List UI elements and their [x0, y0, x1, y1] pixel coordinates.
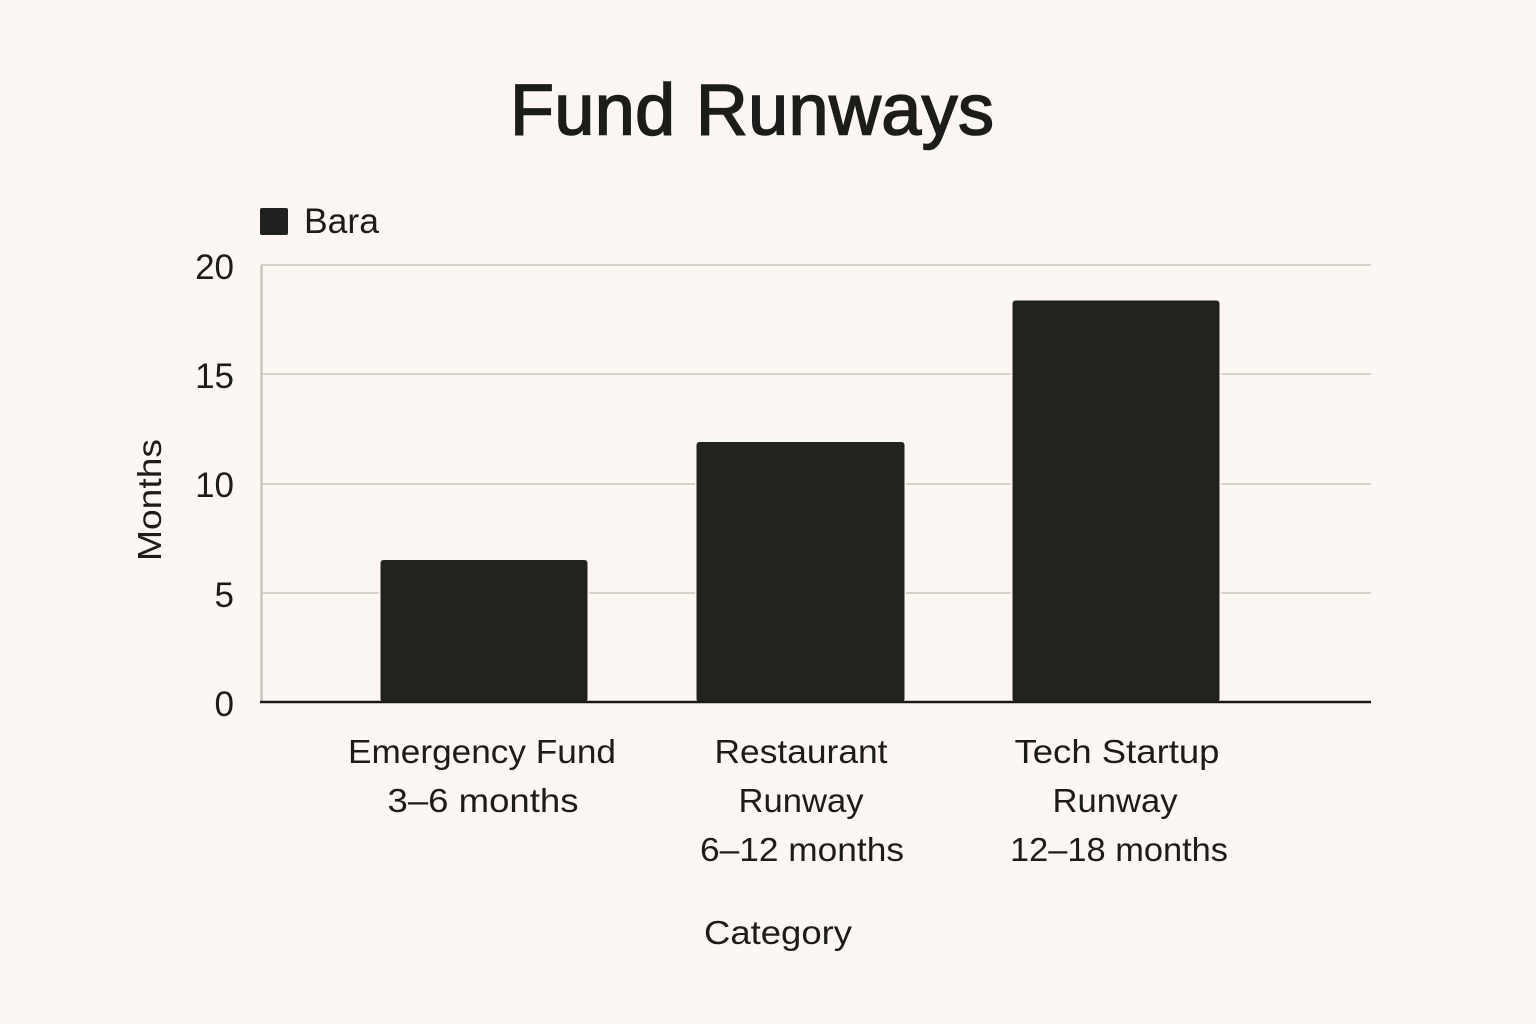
- y axis title: Months: [131, 439, 168, 561]
- category label: Emergency Fund: 3–6 months: [388, 782, 578, 819]
- category label: Emergency Fund: Emergency Fund: [348, 733, 616, 770]
- category label: Restaurant Runway: 6–12 months: [700, 831, 904, 868]
- bar: Emergency Fund: [380, 560, 588, 702]
- y axis tick labels: 0: [215, 685, 234, 724]
- category label: Tech Startup Runway: Runway: [1052, 782, 1178, 819]
- title: Fund Runways: [510, 70, 994, 150]
- category label: Restaurant Runway: Restaurant: [714, 733, 888, 770]
- category label: Tech Startup Runway: [1010, 733, 1228, 868]
- gridlines: [261, 265, 1371, 702]
- y axis tick labels: 15: [195, 357, 234, 396]
- category label: Emergency Fund: [348, 733, 616, 819]
- category label: Restaurant Runway: Runway: [738, 782, 864, 819]
- y axis tick labels: 5: [215, 576, 234, 615]
- y axis tick labels: [195, 248, 234, 724]
- legend: Bara: [304, 202, 380, 241]
- legend: [260, 202, 380, 241]
- x axis baseline: [260, 701, 1371, 703]
- x axis title: Category: [704, 914, 853, 951]
- bar: Tech Startup Runway: [1012, 300, 1220, 702]
- y axis tick labels: 20: [195, 248, 234, 287]
- category label: Tech Startup Runway: Tech Startup: [1014, 733, 1220, 770]
- y axis tick labels: 10: [195, 466, 234, 505]
- category label: Tech Startup Runway: 12–18 months: [1010, 831, 1228, 868]
- bar: Restaurant Runway: [696, 442, 904, 702]
- category label: Restaurant Runway: [700, 733, 904, 868]
